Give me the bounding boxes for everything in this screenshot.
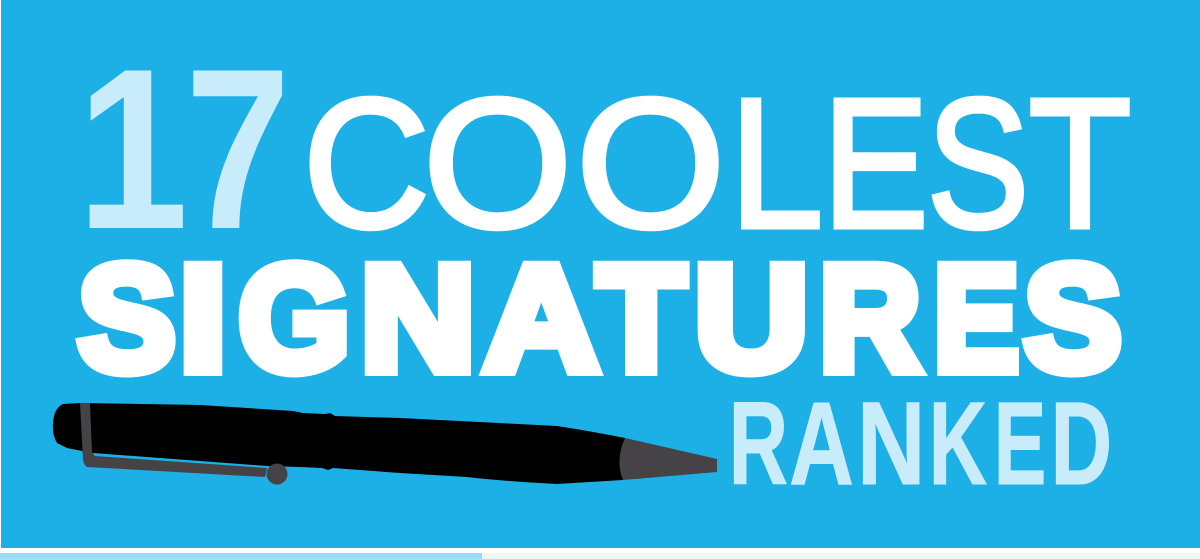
progress bar track bbox=[0, 553, 1200, 559]
title word: SIGNATURES: S bbox=[1024, 234, 1122, 402]
title word: SIGNATURES: A bbox=[484, 234, 599, 402]
title number: 17 bbox=[77, 21, 290, 277]
title word: SIGNATURES: R bbox=[819, 234, 921, 402]
title number: 17: 1 bbox=[77, 21, 188, 277]
title word: RANKED: A bbox=[789, 378, 854, 510]
title word: COOLEST: T bbox=[1029, 60, 1131, 266]
title word: SIGNATURES: I bbox=[179, 234, 227, 402]
title word: SIGNATURES: G bbox=[238, 234, 350, 402]
title word: COOLEST: O bbox=[423, 60, 572, 266]
pen clip ball bbox=[266, 464, 288, 484]
title word: COOLEST: S bbox=[927, 60, 1029, 266]
title word: RANKED: R bbox=[729, 378, 788, 510]
title word: COOLEST: E bbox=[823, 60, 928, 266]
title word: RANKED: E bbox=[994, 378, 1046, 510]
pen clip bbox=[80, 403, 267, 477]
title word: COOLEST bbox=[303, 60, 1131, 266]
title word: SIGNATURES: T bbox=[597, 234, 685, 402]
title word: RANKED bbox=[729, 378, 1112, 510]
title word: SIGNATURES: U bbox=[694, 234, 808, 402]
title word: COOLEST: L bbox=[730, 60, 823, 266]
title word: RANKED: N bbox=[857, 378, 925, 510]
progress bar fill bbox=[0, 553, 482, 559]
title word: SIGNATURES: N bbox=[360, 234, 475, 402]
title word: COOLEST: C bbox=[303, 60, 430, 266]
pen body bbox=[53, 403, 625, 484]
icon: pen bbox=[53, 403, 717, 484]
title word: COOLEST: O bbox=[576, 60, 725, 266]
title word: SIGNATURES: S bbox=[78, 234, 176, 402]
title word: RANKED: D bbox=[1050, 378, 1112, 510]
title word: SIGNATURES bbox=[75, 234, 1122, 402]
title number: 17: 7 bbox=[185, 21, 290, 277]
pen tip bbox=[619, 438, 717, 480]
title word: RANKED: K bbox=[929, 378, 987, 510]
title word: SIGNATURES: E bbox=[934, 234, 1019, 402]
